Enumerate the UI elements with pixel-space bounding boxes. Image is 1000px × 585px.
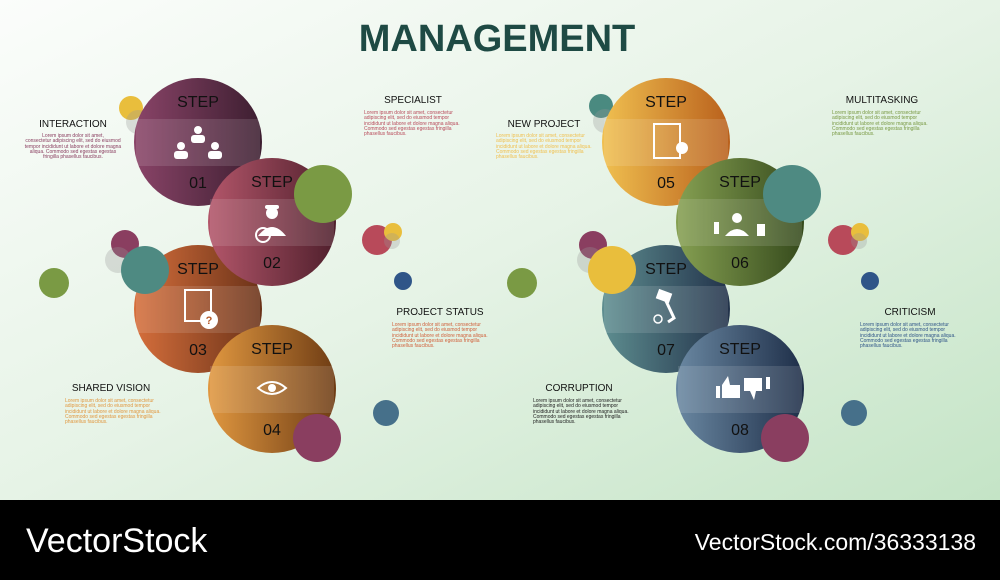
project status: phasellus faucibus.	[392, 343, 435, 349]
step 07: 07	[657, 342, 675, 359]
shared vision: SHARED VISION	[72, 383, 150, 394]
step 03: ?	[206, 315, 213, 327]
shared vision: Lorem ipsum dolor sit amet, consectetur	[65, 398, 154, 404]
shared vision: adipiscing elit, sed do eiusmod tempor	[65, 403, 150, 409]
interaction: Lorem ipsum dolor sit amet,	[42, 133, 104, 139]
project status: PROJECT STATUS	[396, 307, 484, 318]
step 08	[676, 325, 804, 453]
criticism: adipiscing elit, sed do eiusmod tempor	[860, 327, 945, 333]
corruption: CORRUPTION	[545, 383, 613, 394]
footer bar	[0, 500, 1000, 580]
step 03	[134, 245, 262, 373]
corruption: Commodo sed egestas egestas fringilla	[533, 414, 621, 420]
specialist	[364, 95, 460, 137]
text blocks	[25, 95, 956, 425]
step 04	[208, 325, 336, 453]
title: MANAGEMENT	[359, 18, 635, 60]
new project: adipiscing elit, sed do eiusmod tempor	[496, 138, 581, 144]
interaction: tempor incididunt ut labore et dolore magna	[25, 144, 121, 150]
step 08: 08	[731, 422, 749, 439]
footer bar: VectorStock	[26, 522, 208, 560]
corruption: Lorem ipsum dolor sit amet, consectetur	[533, 398, 622, 404]
project status	[392, 307, 488, 349]
specialist: adipiscing elit, sed do eiusmod tempor	[364, 115, 449, 121]
interaction	[25, 119, 121, 160]
specialist: incididunt ut labore et dolore magna aliqua.	[364, 121, 460, 127]
shared vision: Commodo sed egestas egestas fringilla	[65, 414, 153, 420]
multitasking: incididunt ut labore et dolore magna aliqua.	[832, 121, 928, 127]
step 06	[676, 158, 804, 286]
step 04: STEP	[251, 341, 293, 358]
multitasking: adipiscing elit, sed do eiusmod tempor	[832, 115, 917, 121]
project status: Lorem ipsum dolor sit amet, consectetur	[392, 322, 481, 328]
criticism: CRITICISM	[884, 307, 936, 318]
project status: adipiscing elit, sed do eiusmod tempor	[392, 327, 477, 333]
step 01: 01	[189, 175, 207, 192]
new project: Commodo sed egestas egestas fringilla	[496, 149, 584, 155]
step 06: 06	[731, 255, 749, 272]
corruption	[533, 383, 629, 425]
specialist: SPECIALIST	[384, 95, 442, 106]
step 07: STEP	[645, 261, 687, 278]
step 02: STEP	[251, 174, 293, 191]
criticism: Lorem ipsum dolor sit amet, consectetur	[860, 322, 949, 328]
new project	[496, 119, 592, 160]
interaction: INTERACTION	[39, 119, 107, 130]
multitasking: phasellus faucibus.	[832, 131, 875, 137]
step 05: STEP	[645, 94, 687, 111]
criticism: incididunt ut labore et dolore magna aliqua.	[860, 333, 956, 339]
multitasking	[832, 95, 928, 137]
specialist: phasellus faucibus.	[364, 131, 407, 137]
step 01: STEP	[177, 94, 219, 111]
specialist: Lorem ipsum dolor sit amet, consectetur	[364, 110, 453, 116]
multitasking: MULTITASKING	[846, 95, 918, 106]
corruption: phasellus faucibus.	[533, 419, 576, 425]
interaction: fringilla phasellus faucibus.	[43, 154, 103, 160]
shared vision	[65, 383, 161, 425]
corruption: adipiscing elit, sed do eiusmod tempor	[533, 403, 618, 409]
step 01	[134, 78, 262, 206]
criticism: Commodo sed egestas egestas fringilla	[860, 338, 948, 344]
foreground decorative circles	[121, 165, 821, 462]
step 05	[602, 78, 730, 206]
footer bar: VectorStock.com/36333138	[695, 529, 976, 555]
step 05: 05	[657, 175, 675, 192]
multitasking: Commodo sed egestas egestas fringilla	[832, 126, 920, 132]
shared vision: phasellus faucibus.	[65, 419, 108, 425]
specialist: Commodo sed egestas egestas fringilla	[364, 126, 452, 132]
step 04: 04	[263, 422, 281, 439]
step 02: 02	[263, 255, 281, 272]
step 02	[208, 158, 336, 286]
step 07	[602, 245, 730, 373]
step 03: STEP	[177, 261, 219, 278]
project status: incididunt ut labore et dolore magna aliqua.	[392, 333, 488, 339]
corruption: incididunt ut labore et dolore magna aliqua.	[533, 409, 629, 415]
decorative circles	[39, 94, 879, 426]
interaction: aliqua. Commodo sed egestas egestas	[30, 149, 117, 155]
step 03: 03	[189, 342, 207, 359]
step 06: STEP	[719, 174, 761, 191]
shared vision: incididunt ut labore et dolore magna aliqua.	[65, 409, 161, 415]
new project: phasellus faucibus.	[496, 154, 539, 160]
step 08: STEP	[719, 341, 761, 358]
criticism: phasellus faucibus.	[860, 343, 903, 349]
project status: Commodo sed egestas egestas fringilla	[392, 338, 480, 344]
new project: incididunt ut labore et dolore magna aliqua.	[496, 144, 592, 150]
criticism	[860, 307, 956, 349]
new project: Lorem ipsum dolor sit amet, consectetur	[496, 133, 585, 139]
new project: NEW PROJECT	[508, 119, 580, 130]
multitasking: Lorem ipsum dolor sit amet, consectetur	[832, 110, 921, 116]
interaction: consectetur adipiscing elit, sed do eiusmod	[25, 138, 121, 144]
